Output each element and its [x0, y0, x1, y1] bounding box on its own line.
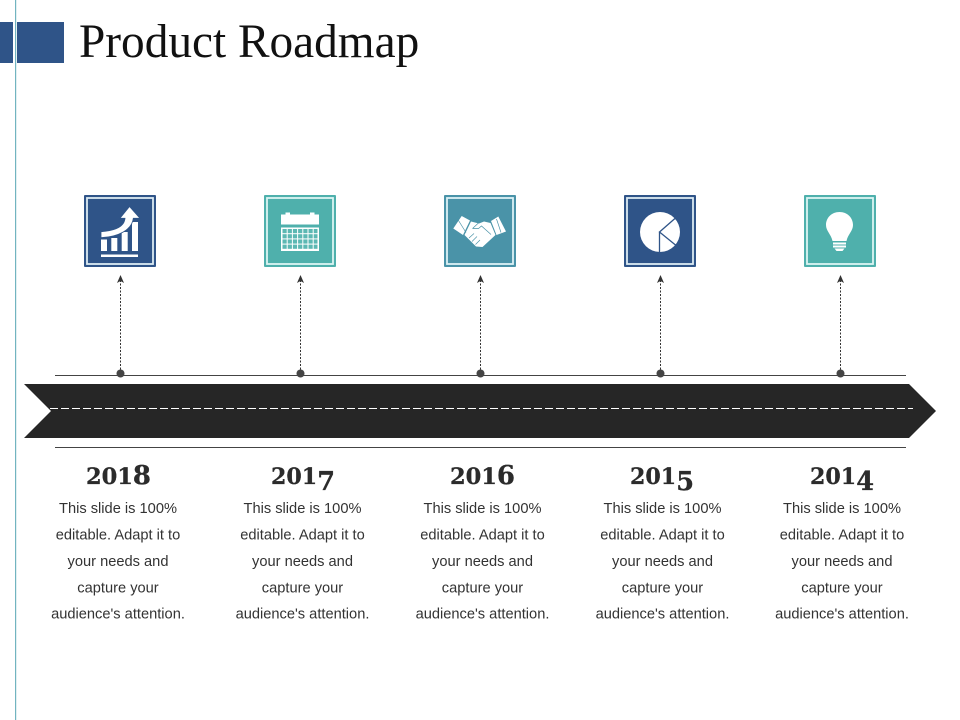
text block 2016: capture your: [442, 580, 523, 596]
connector 2016: [476, 275, 484, 378]
timeline rule bottom: [55, 447, 906, 448]
text block 2017: your needs and: [252, 554, 353, 570]
text block 2017: editable. Adapt it to: [240, 528, 365, 544]
text block 2016: your needs and: [432, 554, 533, 570]
text block 2018: audience's attention.: [51, 606, 185, 622]
text block 2017: capture your: [262, 580, 343, 596]
connector 2018: [116, 275, 124, 378]
icon: calendar: [264, 195, 336, 267]
text block 2015: audience's attention.: [596, 606, 729, 622]
year 2014: 201: [810, 464, 857, 490]
connector 2015: [656, 275, 664, 378]
timeline rule top: [55, 375, 906, 376]
year 2017: 201: [271, 464, 318, 490]
text block 2014: editable. Adapt it to: [780, 528, 904, 544]
text block 2014: This slide is 100%: [783, 501, 901, 517]
text block 2015: your needs and: [612, 554, 713, 570]
timeline chevron band: [24, 384, 936, 438]
text block 2018: capture your: [77, 580, 159, 596]
text block 2017: This slide is 100%: [244, 501, 362, 517]
text block 2014: capture your: [801, 580, 883, 596]
connector 2017: [296, 275, 304, 378]
text block 2015: editable. Adapt it to: [600, 528, 725, 544]
icon: handshake: [444, 195, 516, 267]
text block 2015: capture your: [622, 580, 703, 596]
text block 2014: audience's attention.: [775, 606, 909, 622]
year 2015: 5: [676, 467, 694, 497]
year 2017: 7: [317, 467, 335, 497]
text block 2018: your needs and: [68, 554, 168, 570]
icon: light bulb: [804, 195, 876, 267]
text block 2014: your needs and: [792, 554, 892, 570]
year 2016: 2016: [450, 461, 515, 491]
text block 2018: This slide is 100%: [59, 501, 177, 517]
text block 2015: This slide is 100%: [604, 501, 722, 517]
text block 2017: audience's attention.: [236, 606, 369, 622]
text block 2016: This slide is 100%: [424, 501, 542, 517]
text block 2018: editable. Adapt it to: [56, 528, 180, 544]
icon: growth chart: [84, 195, 156, 267]
year 2018: 2018: [86, 461, 151, 491]
left vertical rule: [15, 0, 16, 720]
text block 2016: editable. Adapt it to: [420, 528, 545, 544]
connector 2014: [836, 275, 844, 378]
title marker squares: [0, 22, 64, 63]
icon: pie chart: [624, 195, 696, 267]
year 2014: 4: [856, 467, 874, 497]
text block 2016: audience's attention.: [416, 606, 549, 622]
year 2015: 201: [630, 464, 677, 490]
title: Product Roadmap: [79, 16, 419, 68]
